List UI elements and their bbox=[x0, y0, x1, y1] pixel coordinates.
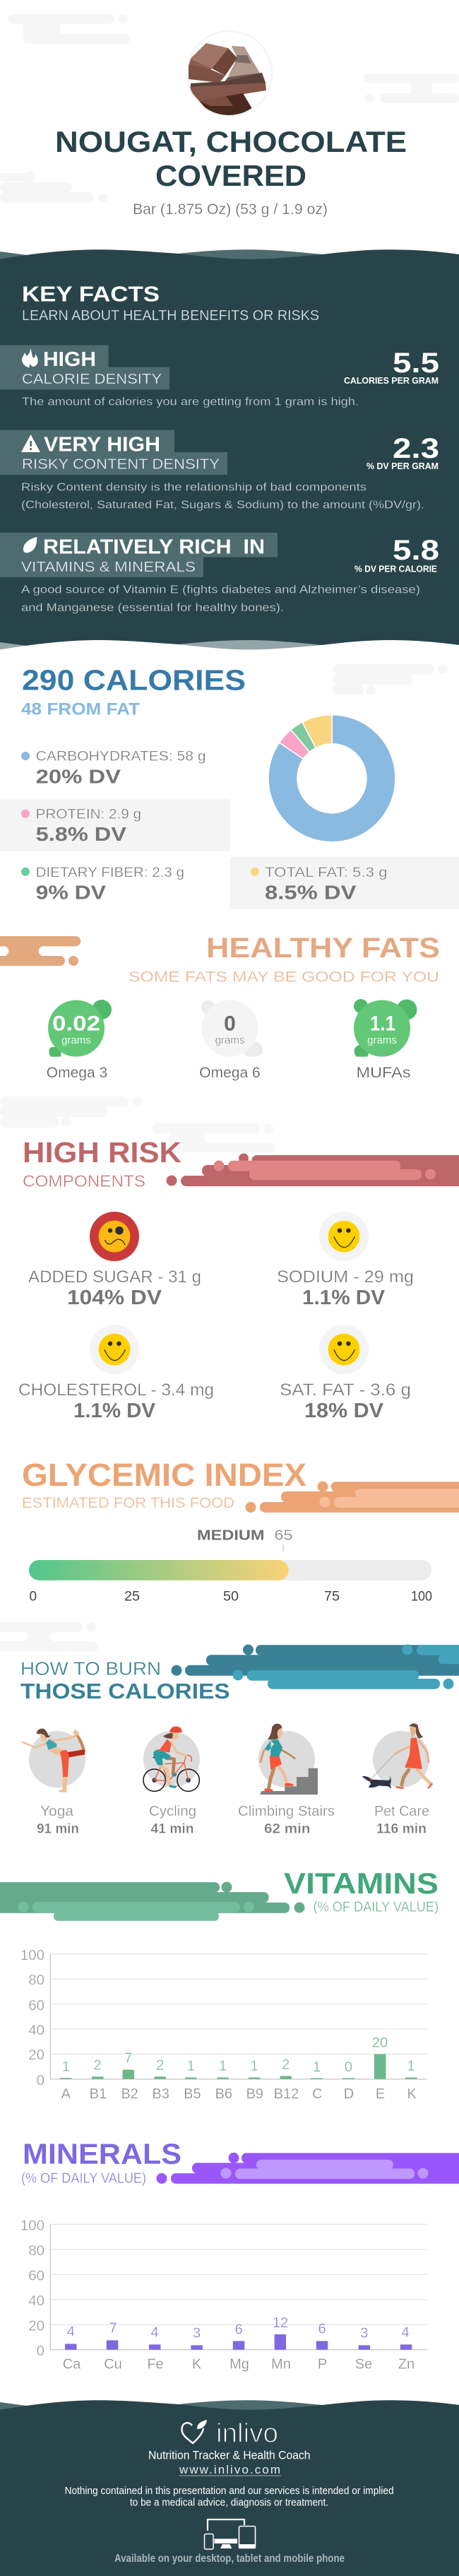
sodium: SODIUM - 29 mg bbox=[277, 1268, 414, 1287]
background cloud bbox=[333, 664, 448, 695]
fact: vitamins and minerals: RELATIVELY RICH IN bbox=[43, 536, 265, 559]
bar chart: vitamins: 1 bbox=[187, 2059, 195, 2074]
legend: dietary fiber: 9% DV bbox=[36, 882, 106, 904]
decorative bar shape bbox=[171, 1645, 459, 1689]
activity: climbing stairs: Climbing Stairs bbox=[238, 1804, 335, 1819]
omega 3 badge: grams bbox=[61, 1034, 91, 1046]
added sugar: 104% DV bbox=[67, 1287, 162, 1309]
fact: calorie density: 5.5 bbox=[393, 348, 439, 379]
heading: vitamins: VITAMINS bbox=[284, 1867, 439, 1900]
panel: healthy fats bbox=[0, 933, 440, 1081]
gauge bar bbox=[29, 1560, 431, 1581]
fact: risky content density: (Cholesterol, Saturated Fat, Sugars & Sodium) to the amount (%DV/gr). bbox=[21, 500, 424, 512]
disclaimer: Nothing contained in this presentation and our services is intended or implied bbox=[65, 2485, 394, 2497]
bar chart: minerals: P bbox=[318, 2357, 327, 2373]
legend: protein bbox=[0, 799, 230, 851]
panel: glycemic index bbox=[22, 1457, 459, 1605]
fact: vitamins and minerals: VITAMINS & MINERALS bbox=[21, 559, 196, 575]
background cloud bbox=[0, 1622, 98, 1651]
fact: vitamins and minerals: and Manganese (essential for healthy bones). bbox=[21, 602, 284, 614]
fact: calorie density bbox=[0, 345, 439, 408]
bar chart: minerals: 4 bbox=[401, 2325, 410, 2341]
disclaimer: to be a medical advice, diagnosis or treatment. bbox=[130, 2497, 328, 2509]
bar chart: vitamins: B3 bbox=[152, 2086, 169, 2102]
gauge scale labels: 75 bbox=[324, 1590, 340, 1605]
added sugar bbox=[28, 1212, 201, 1309]
bar chart: minerals: Fe bbox=[147, 2357, 164, 2373]
panel: vitamins bbox=[0, 1867, 439, 2102]
fact: vitamins and minerals bbox=[0, 533, 439, 614]
bar chart: minerals: 4 bbox=[67, 2324, 75, 2340]
tagline: Nutrition Tracker & Health Coach bbox=[148, 2449, 311, 2462]
bar chart: vitamins: 100 bbox=[20, 1947, 44, 1963]
bar chart: vitamins: B2 bbox=[121, 2086, 138, 2102]
bar chart: vitamins: B5 bbox=[184, 2086, 201, 2102]
MUFAs badge: MUFAs bbox=[356, 1065, 411, 1081]
heading: glycemic index: GLYCEMIC INDEX bbox=[22, 1457, 306, 1493]
bar chart: minerals: Cu bbox=[104, 2357, 122, 2373]
icon: happy face bbox=[90, 1325, 139, 1374]
decorative bar shape bbox=[0, 1882, 305, 1921]
bar chart: vitamins: 2 bbox=[156, 2057, 164, 2073]
bar chart: minerals: 12 bbox=[273, 2315, 288, 2331]
heading: 290 calories: 48 FROM FAT bbox=[21, 700, 140, 719]
added sugar: ADDED SUGAR - 31 g bbox=[28, 1268, 201, 1287]
fact: vitamins and minerals: A good source of Vitamin E (fights diabetes and Alzheimer’s disease) bbox=[21, 584, 420, 596]
activity: yoga: 91 min bbox=[37, 1821, 79, 1836]
legend: dietary fiber bbox=[21, 865, 184, 904]
gauge scale labels: 50 bbox=[223, 1590, 239, 1605]
decorative bar shape bbox=[167, 1153, 459, 1186]
bar chart: minerals: 3 bbox=[193, 2325, 201, 2341]
omega 3 badge: 0.02 bbox=[52, 1012, 100, 1036]
gauge scale labels: 100 bbox=[411, 1590, 432, 1605]
activity: cycling: Cycling bbox=[149, 1804, 196, 1819]
heading: healthy fats: SOME FATS MAY BE GOOD FOR YOU bbox=[129, 968, 439, 985]
heading: how to burn: THOSE CALORIES bbox=[20, 1679, 230, 1703]
logo: inlivo bbox=[181, 2419, 278, 2449]
fact: calorie density: HIGH bbox=[43, 348, 96, 371]
legend: carbohydrates bbox=[21, 749, 206, 787]
bar chart: vitamins: 1 bbox=[62, 2060, 70, 2075]
icon: happy face bbox=[319, 1325, 369, 1374]
icon: warning triangle bbox=[21, 435, 40, 452]
legend: total fat: TOTAL FAT: 5.3 g bbox=[265, 865, 387, 880]
bar chart: minerals: Mn bbox=[271, 2357, 291, 2373]
activity: pet care: Pet Care bbox=[374, 1804, 429, 1819]
bar chart: vitamins: K bbox=[407, 2086, 417, 2102]
bar chart: vitamins: E bbox=[376, 2086, 385, 2102]
bar chart: vitamins: 7 bbox=[124, 2050, 132, 2066]
cholesterol: 1.1% DV bbox=[73, 1400, 156, 1422]
website link: www.inlivo.com bbox=[179, 2463, 280, 2476]
saturated fat: SAT. FAT - 3.6 g bbox=[280, 1381, 411, 1400]
bar chart: minerals: 6 bbox=[318, 2322, 326, 2337]
heading: healthy fats: HEALTHY FATS bbox=[206, 933, 440, 964]
fact: vitamins and minerals: 5.8 bbox=[393, 535, 439, 566]
fact: risky content density: % DV PER GRAM bbox=[366, 461, 439, 471]
bar chart: minerals: 100 bbox=[20, 2217, 44, 2234]
bar chart: vitamins: B1 bbox=[90, 2086, 107, 2102]
bar chart: vitamins: 60 bbox=[28, 1997, 44, 2014]
icon: sad face bbox=[90, 1212, 139, 1261]
omega 6 badge: Omega 6 bbox=[199, 1065, 261, 1081]
heading: glycemic index bbox=[22, 1457, 306, 1511]
bar chart: vitamins: A bbox=[61, 2086, 71, 2102]
bar chart: minerals: 80 bbox=[28, 2243, 44, 2259]
background clouds bbox=[0, 14, 459, 203]
gauge value: MEDIUM bbox=[197, 1528, 264, 1543]
fact: risky content density bbox=[0, 430, 439, 512]
bar chart: vitamins: 1 bbox=[219, 2059, 227, 2074]
activity: yoga: Yoga bbox=[40, 1804, 74, 1819]
heading: healthy fats bbox=[129, 933, 440, 985]
panel: minerals bbox=[20, 2138, 459, 2373]
heading: minerals: MINERALS bbox=[23, 2138, 181, 2170]
serving size: Bar (1.875 Oz) (53 g / 1.9 oz) bbox=[133, 201, 328, 218]
illustration: dog walker bbox=[362, 1723, 432, 1789]
fact: risky content density: VERY HIGH bbox=[44, 434, 160, 456]
icon: leaf bbox=[23, 537, 37, 553]
illustration: cyclist bbox=[143, 1726, 200, 1791]
icon: happy face bbox=[319, 1212, 369, 1261]
sodium bbox=[277, 1212, 414, 1309]
bar chart: vitamins: 20 bbox=[372, 2035, 388, 2050]
activity: pet care bbox=[362, 1723, 432, 1836]
panel: high risk components bbox=[0, 1097, 459, 1422]
activity: climbing stairs: 62 min bbox=[264, 1821, 311, 1836]
panel: key facts bbox=[0, 249, 459, 657]
omega 6 badge: grams bbox=[215, 1034, 244, 1046]
bar chart: vitamins: B9 bbox=[246, 2086, 263, 2102]
legend: carbohydrates: CARBOHYDRATES: 58 g bbox=[36, 749, 206, 764]
bar chart: minerals: Zn bbox=[398, 2357, 415, 2373]
bar chart: vitamins: 1 bbox=[313, 2060, 321, 2075]
bar chart: vitamins: 0 bbox=[345, 2060, 352, 2075]
availability note: Available on your desktop, tablet and mobile phone bbox=[114, 2553, 345, 2565]
title bbox=[55, 125, 407, 192]
saturated fat: 18% DV bbox=[304, 1400, 384, 1422]
cholesterol: CHOLESTEROL - 3.4 mg bbox=[18, 1381, 214, 1400]
heading: 290 calories bbox=[21, 664, 246, 719]
illustration: stair climber bbox=[258, 1724, 318, 1795]
gauge scale labels: 0 bbox=[30, 1590, 37, 1605]
bar chart: minerals: 6 bbox=[234, 2322, 243, 2337]
saturated fat bbox=[280, 1325, 411, 1422]
title: COVERED bbox=[155, 159, 306, 192]
decorative bar shape bbox=[0, 936, 81, 966]
heading: minerals: (% OF DAILY VALUE) bbox=[21, 2170, 146, 2186]
omega 3 badge: Omega 3 bbox=[47, 1065, 107, 1081]
bar chart: minerals: 60 bbox=[28, 2268, 44, 2283]
bar chart: minerals: 0 bbox=[37, 2343, 44, 2359]
bar chart: vitamins: B6 bbox=[215, 2086, 232, 2102]
decorative bar shape bbox=[157, 2153, 459, 2184]
bar chart: minerals: 20 bbox=[28, 2317, 44, 2334]
MUFAs badge: 1.1 bbox=[370, 1012, 395, 1036]
gauge scale labels: 25 bbox=[124, 1590, 140, 1605]
icon: devices bbox=[205, 2519, 256, 2549]
bar chart: minerals: Ca bbox=[63, 2357, 81, 2373]
title: NOUGAT, CHOCOLATE bbox=[55, 125, 407, 158]
fact: risky content density: RISKY CONTENT DENSITY bbox=[22, 456, 220, 472]
activity: yoga bbox=[23, 1729, 85, 1836]
bar chart: minerals: 7 bbox=[109, 2321, 117, 2336]
heading: high risk bbox=[23, 1136, 181, 1190]
legend: dietary fiber: DIETARY FIBER: 2.3 g bbox=[36, 865, 184, 880]
panel: how to burn calories bbox=[0, 1622, 459, 1836]
activity: climbing stairs bbox=[238, 1724, 335, 1836]
heading: vitamins: (% OF DAILY VALUE) bbox=[314, 1900, 439, 1915]
bar chart: vitamins: 2 bbox=[282, 2057, 290, 2072]
activity: cycling: 41 min bbox=[151, 1821, 193, 1836]
bar chart: vitamins: 80 bbox=[28, 1972, 44, 1988]
heading: vitamins bbox=[284, 1867, 439, 1915]
heading: high risk: HIGH RISK bbox=[23, 1136, 181, 1169]
panel: calories bbox=[0, 664, 459, 909]
heading: key facts: KEY FACTS bbox=[22, 282, 160, 307]
header section bbox=[0, 14, 459, 218]
cholesterol bbox=[18, 1325, 214, 1422]
bar chart: vitamins: 1 bbox=[407, 2059, 415, 2074]
heading: high risk: COMPONENTS bbox=[23, 1171, 145, 1190]
omega 6 badge: 0 bbox=[224, 1012, 236, 1036]
fact: risky content density: Risky Content density is the relationship of bad components bbox=[21, 481, 366, 493]
bar chart: minerals: 3 bbox=[360, 2326, 368, 2341]
bar chart: vitamins: C bbox=[312, 2086, 323, 2102]
fact: calorie density: CALORIES PER GRAM bbox=[344, 375, 439, 386]
bar chart: vitamins: 1 bbox=[250, 2059, 258, 2074]
bar chart: vitamins: 0 bbox=[37, 2072, 44, 2088]
icon: flame bbox=[22, 348, 38, 367]
heading: glycemic index: ESTIMATED FOR THIS FOOD bbox=[22, 1494, 234, 1511]
dark background with waves bbox=[0, 2400, 459, 2576]
fact: risky content density: 2.3 bbox=[393, 433, 439, 464]
food image: chocolate pieces bbox=[187, 31, 272, 116]
heading: how to burn: HOW TO BURN bbox=[20, 1658, 161, 1679]
bar chart: minerals: 4 bbox=[150, 2325, 159, 2341]
bar chart: vitamins: 20 bbox=[28, 2047, 44, 2063]
bar chart: minerals: Se bbox=[355, 2357, 372, 2373]
panel: footer bbox=[0, 2400, 459, 2576]
fact: calorie density: The amount of calories you are getting from 1 gram is high. bbox=[22, 396, 359, 408]
bar chart: minerals bbox=[20, 2217, 427, 2373]
decorative bar shape bbox=[246, 1481, 459, 1513]
legend: protein: PROTEIN: 2.9 g bbox=[36, 806, 141, 822]
legend: total fat: 8.5% DV bbox=[265, 882, 357, 904]
legend: total fat bbox=[230, 857, 459, 909]
heading: minerals bbox=[21, 2138, 181, 2186]
heading: 290 calories: 290 CALORIES bbox=[22, 664, 246, 697]
bar chart: minerals: K bbox=[192, 2357, 202, 2373]
omega 3 badge bbox=[47, 1000, 112, 1081]
fact: calorie density: CALORIE DENSITY bbox=[22, 371, 162, 387]
donut chart bbox=[268, 715, 395, 842]
bar chart: minerals: 40 bbox=[28, 2293, 44, 2309]
heading: key facts bbox=[22, 282, 319, 324]
gauge value: 65 bbox=[274, 1528, 292, 1543]
legend: carbohydrates: 20% DV bbox=[36, 765, 121, 787]
omega 6 badge bbox=[199, 1000, 263, 1081]
MUFAs badge bbox=[354, 999, 417, 1081]
gauge scale labels bbox=[30, 1590, 432, 1605]
bar chart: vitamins: 40 bbox=[28, 2022, 44, 2038]
logo: inlivo: inlivo bbox=[216, 2419, 278, 2449]
background clouds bbox=[0, 1097, 275, 1152]
heading: how to burn bbox=[20, 1658, 230, 1703]
dark background with waves bbox=[0, 249, 459, 657]
bar chart: vitamins: D bbox=[344, 2086, 354, 2102]
activity: pet care: 116 min bbox=[376, 1821, 427, 1836]
activity: cycling bbox=[143, 1726, 200, 1836]
heading: key facts: LEARN ABOUT HEALTH BENEFITS OR RISKS bbox=[22, 308, 319, 324]
bar chart: vitamins: 2 bbox=[93, 2057, 102, 2073]
bar chart: minerals: Mg bbox=[230, 2357, 249, 2373]
fact: vitamins and minerals: % DV PER CALORIE bbox=[354, 564, 437, 574]
gauge value bbox=[197, 1528, 292, 1552]
MUFAs badge: grams bbox=[367, 1034, 397, 1046]
legend: protein: 5.8% DV bbox=[36, 823, 126, 845]
illustration: yoga pose bbox=[23, 1729, 85, 1792]
bar chart: vitamins: B12 bbox=[274, 2086, 299, 2102]
bar chart: vitamins bbox=[20, 1947, 427, 2102]
disclaimer bbox=[65, 2485, 394, 2509]
sodium: 1.1% DV bbox=[302, 1287, 386, 1309]
